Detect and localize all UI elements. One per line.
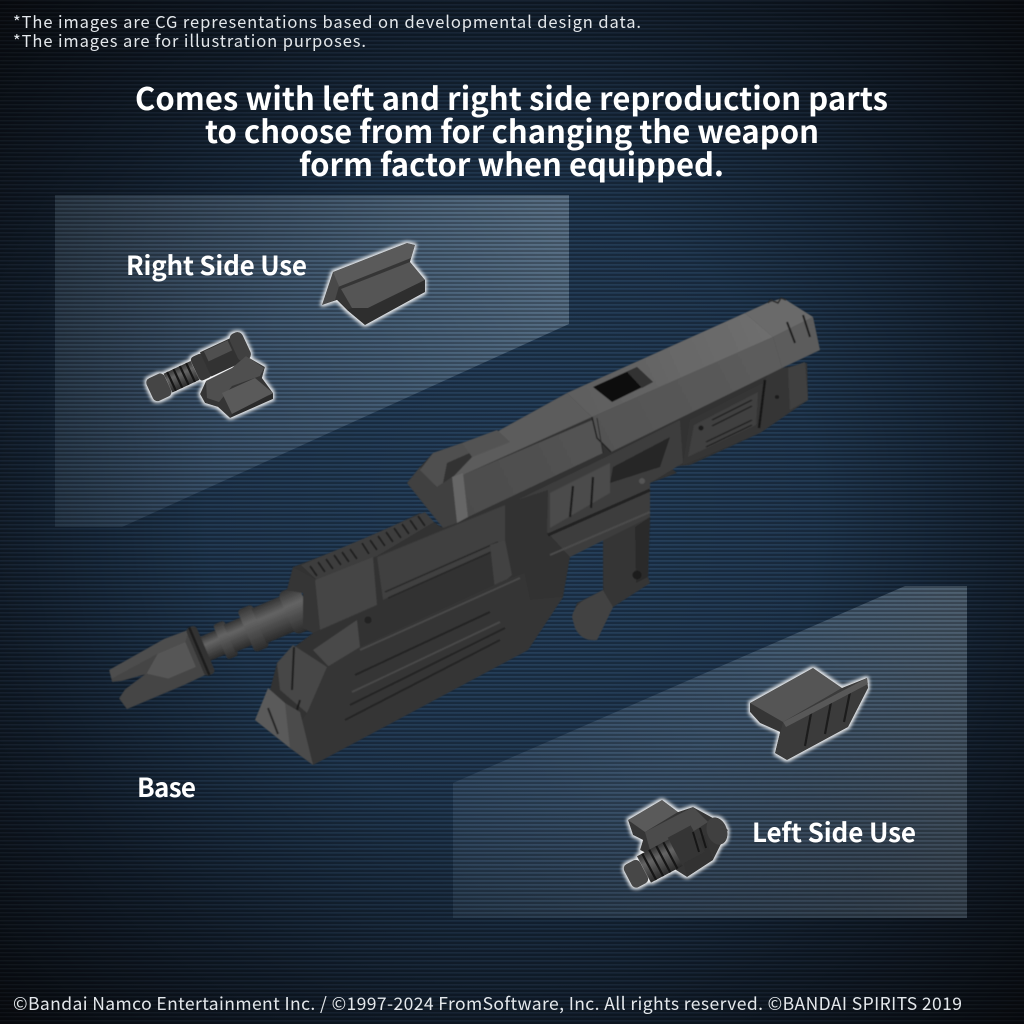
magazine slot <box>593 367 653 402</box>
icon: base weapon <box>104 298 820 765</box>
barrel and muzzle <box>104 582 317 711</box>
central frame <box>517 420 683 600</box>
copyright footer: ©Bandai Namco Entertainment Inc. / ©1997-2024 FromSoftware, Inc. All rights reserved. ©BANDAI SPIRITS 2019 <box>13 991 962 1016</box>
icon: left side tab part <box>750 668 868 760</box>
label: base: Base <box>137 768 196 805</box>
icon: right side tab part <box>322 243 425 325</box>
title: to choose from for changing the weapon <box>205 107 819 152</box>
label: right side use: Right Side Use <box>126 246 307 283</box>
disclaimer notes: *The images are CG representations based on developmental design data. <box>13 9 641 33</box>
grip <box>572 517 650 640</box>
silhouette <box>255 298 820 765</box>
label: left side use: Left Side Use <box>752 813 916 850</box>
title: form factor when equipped. <box>299 140 724 185</box>
disclaimer notes <box>13 9 641 52</box>
panel: left side use backdrop <box>453 586 967 918</box>
panel: right side use backdrop <box>55 195 569 527</box>
title: Comes with left and right side reproduction parts <box>135 74 888 119</box>
disclaimer notes: *The images are for illustration purposes. <box>13 28 366 52</box>
front frame blocks <box>287 505 515 650</box>
rear sight block <box>407 467 457 528</box>
lower block <box>255 560 563 765</box>
top rail ribs <box>301 512 434 580</box>
slide <box>407 298 820 528</box>
icon: left side muzzle part <box>620 800 731 891</box>
rear frame panel <box>683 362 808 465</box>
title <box>135 74 888 185</box>
icon: right side muzzle part <box>142 330 273 418</box>
